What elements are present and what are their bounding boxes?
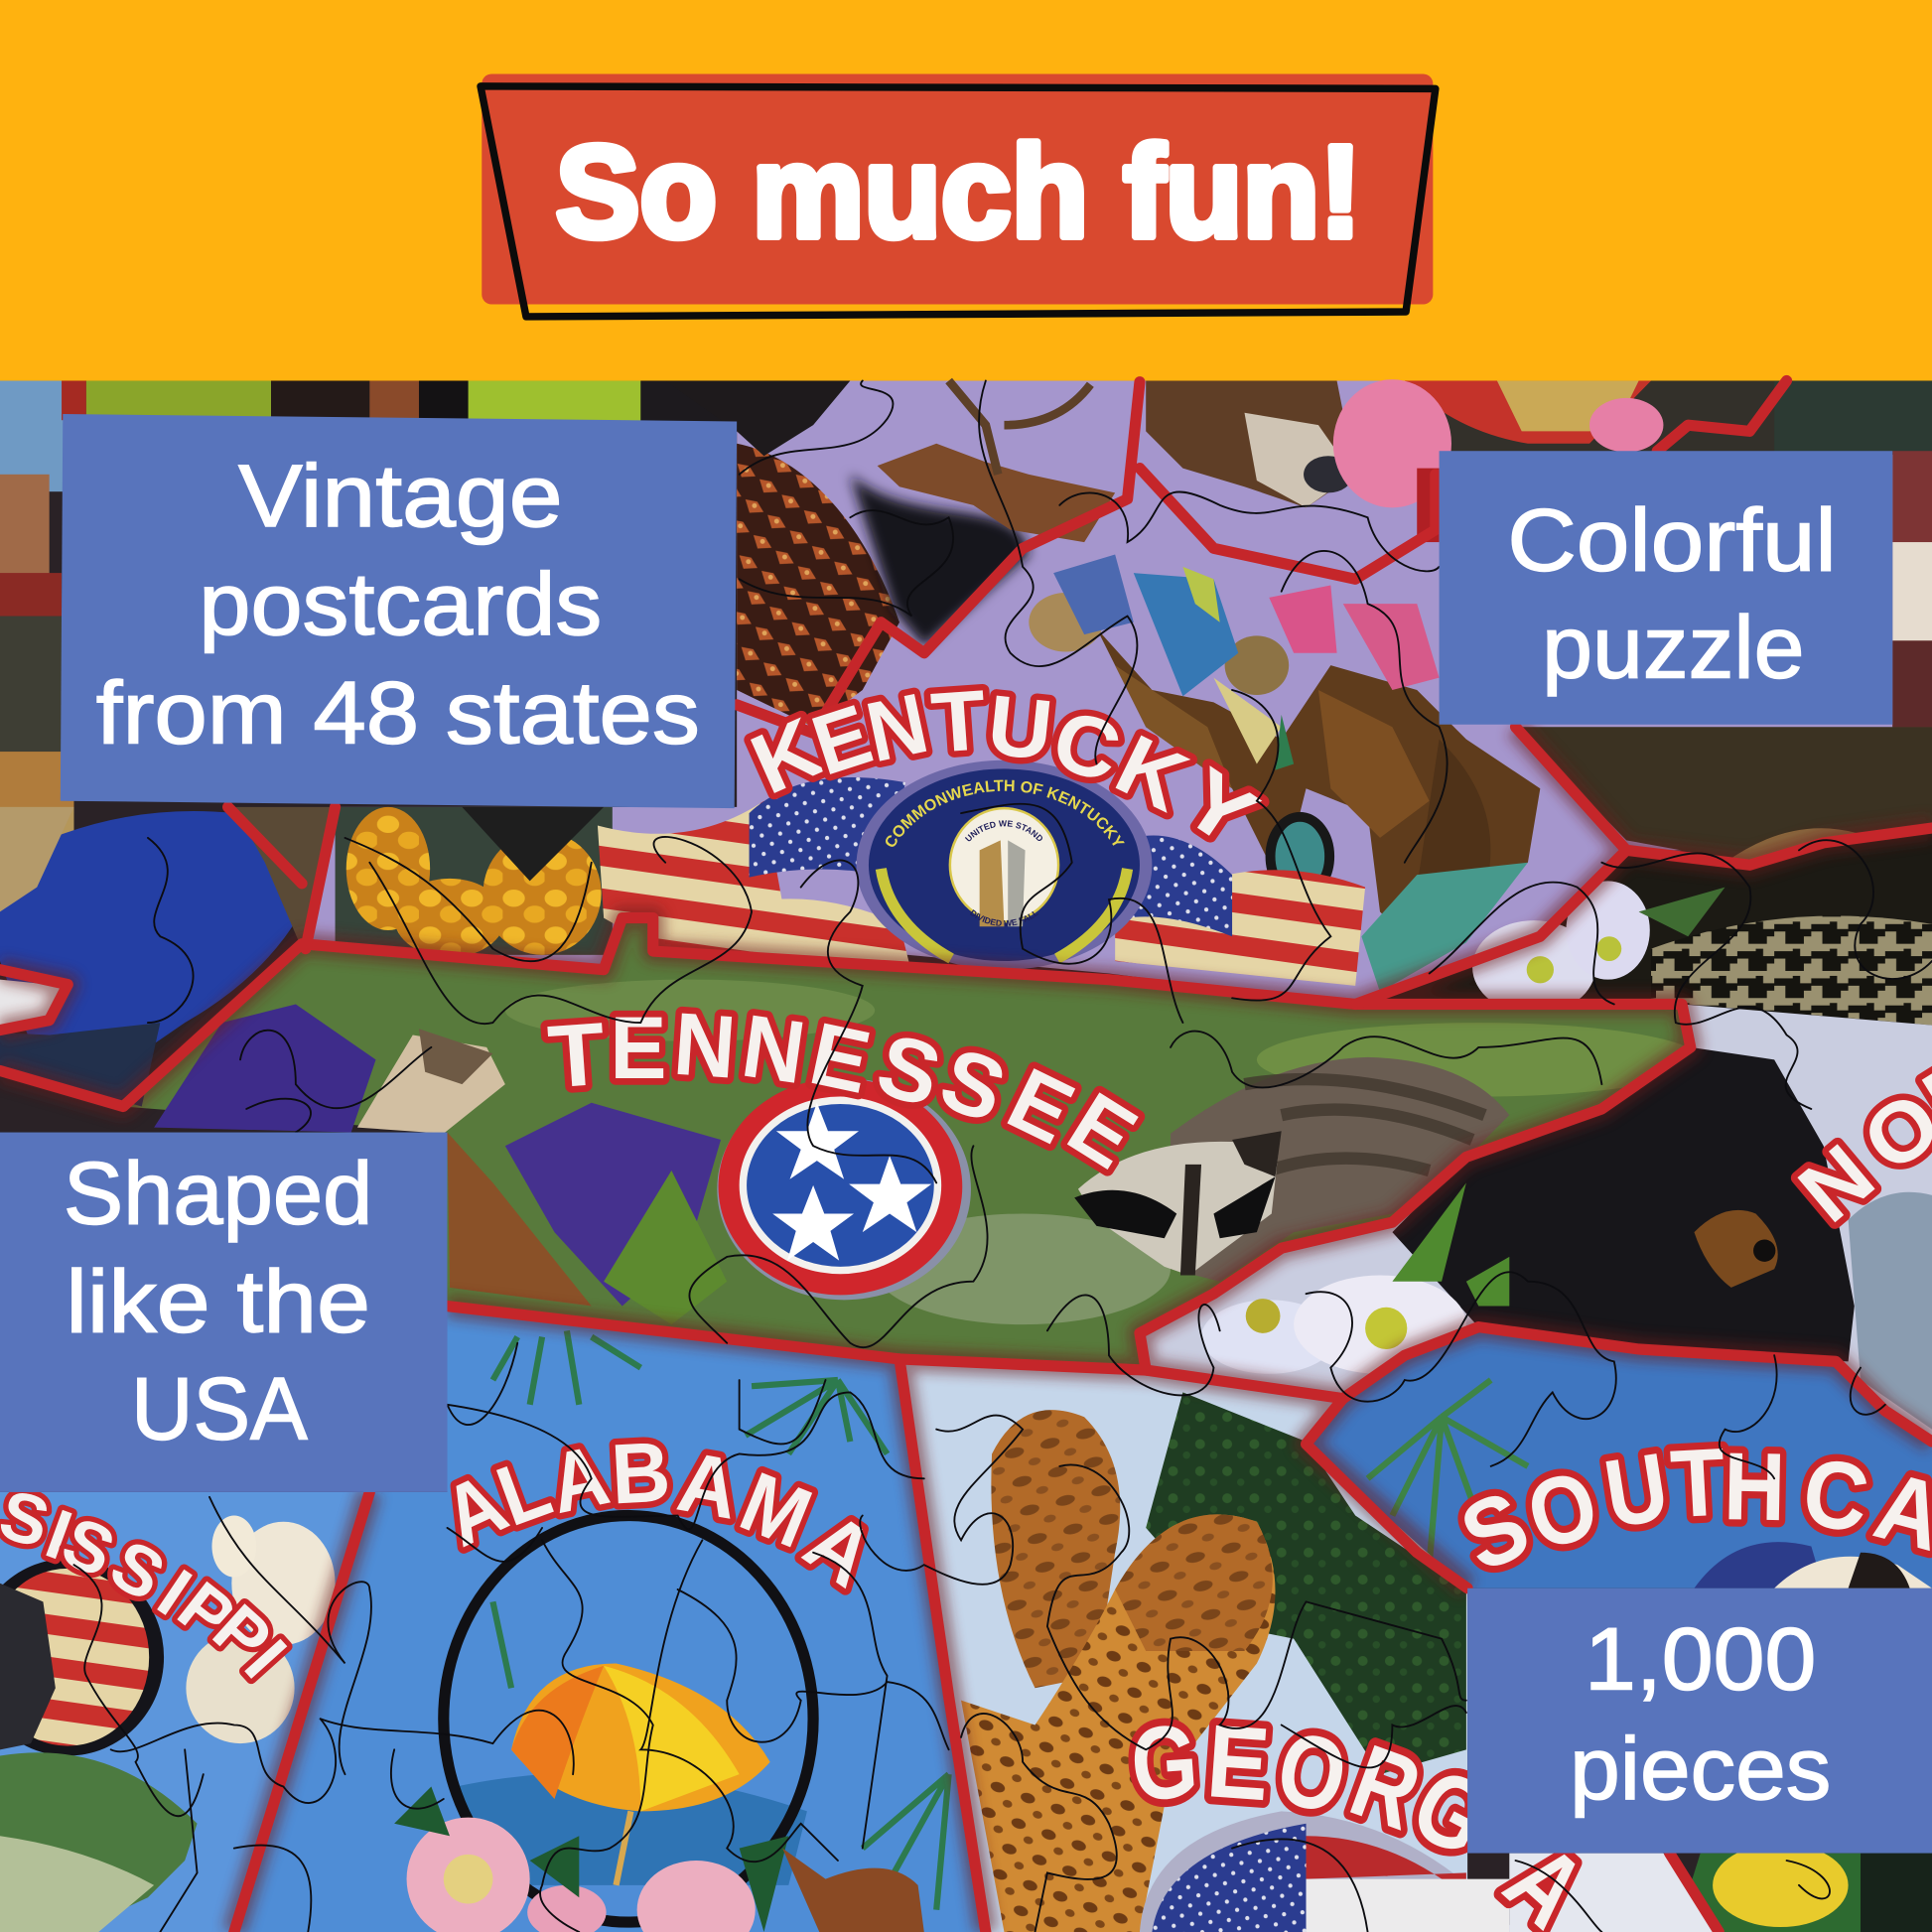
illustration: light hill on Tennessee [505, 980, 1701, 1324]
illustration: bass fish [0, 1752, 198, 1932]
panel: colorful puzzle: puzzle [1542, 598, 1805, 697]
state name: South Carolina: T [1668, 1428, 1727, 1538]
state name: Kentucky: E [801, 686, 883, 793]
illustration: deer [878, 380, 1115, 542]
state name: Tennessee: E [802, 1004, 879, 1112]
state name: Tennessee: S [867, 1014, 951, 1126]
state name: Alabama: A [788, 1493, 892, 1605]
state name: Alabama: A [542, 1428, 617, 1532]
panel: colorful puzzle: Colorful [1507, 490, 1837, 590]
state name: Mississippi: P [164, 1567, 249, 1657]
panel: 1,000 pieces: 1,000 [1585, 1609, 1816, 1709]
state name: Mississippi: I [145, 1554, 205, 1630]
region: dark top right [1405, 380, 1932, 752]
illustration: dogwood flowers North Carolina [1201, 1182, 1509, 1374]
panel: colorful puzzle [1440, 451, 1892, 725]
region: Kentucky background [302, 380, 1932, 1004]
illustration: Kentucky goldenrod [336, 807, 613, 957]
state name: Georgia: O [1268, 1711, 1356, 1837]
illustration: cave maze pattern [1651, 916, 1932, 1026]
state name: South Carolina: O [1516, 1449, 1609, 1571]
state name: Mississippi [0, 1474, 302, 1692]
panel: vintage postcards: postcards [199, 554, 602, 653]
illustration: Georgia trees [1146, 1392, 1466, 1774]
state name: Mississippi: I [37, 1494, 81, 1575]
illustration: South Carolina palmetto [1368, 1380, 1528, 1565]
panel: shaped like the USA: Shaped [64, 1143, 372, 1242]
state name: Kentucky [738, 672, 1274, 866]
illustration: Kentucky seal: DIVIDED WE FALL [970, 909, 1038, 926]
illustration: Alabama palms [492, 1330, 949, 1910]
state name: Alabama: L [485, 1440, 563, 1545]
state name: Tennessee: E [994, 1048, 1088, 1163]
title banner: So much fun! [556, 118, 1361, 264]
region: North Carolina background [1140, 1004, 1932, 1442]
state name: South Carolina: C [1797, 1438, 1875, 1553]
state name: Tennessee: N [737, 996, 811, 1103]
illustration: Kentucky seal: UNITED WE STAND [965, 820, 1042, 842]
illustration: left iris [154, 1004, 376, 1133]
puzzle piece cut lines [73, 380, 1932, 1932]
state name: Tennessee: T [545, 1004, 609, 1107]
state name: Tennessee: E [1052, 1073, 1153, 1187]
illustration: bird head top [665, 380, 850, 456]
state name: Kentucky: N [859, 674, 935, 780]
illustration: camellias [394, 1787, 788, 1932]
illustration: raccoon [1074, 1057, 1509, 1282]
state name: Georgia: G [1395, 1746, 1507, 1878]
illustration: Kentucky seal [856, 760, 1152, 969]
state name: South Carolina [1446, 1428, 1932, 1591]
state name: Alabama: A [430, 1455, 520, 1565]
illustration: Mississippi flag and butterfly [0, 1559, 164, 1756]
illustration: gray water North Carolina [1849, 1192, 1932, 1430]
illustration: peanuts [961, 1410, 1276, 1932]
panel: shaped like the USA: like the [66, 1252, 370, 1351]
state name: Georgia: R [1337, 1724, 1435, 1853]
illustration: brown thrasher [357, 1029, 592, 1307]
state name: Kentucky: Y [1166, 749, 1274, 866]
region: South Carolina [1307, 1327, 1932, 1588]
region: Alabama [234, 1307, 986, 1932]
state name: Tennessee: E [610, 999, 666, 1098]
title banner [481, 73, 1436, 317]
illustration: carnations [1333, 379, 1663, 542]
state name: Kentucky: C [1042, 691, 1131, 800]
panel: vintage postcards: Vintage [238, 446, 563, 545]
panel: shaped like the USA [0, 1133, 448, 1492]
state name: Tennessee [545, 994, 1153, 1187]
state name: Kentucky: U [983, 677, 1057, 778]
panel: shaped like the USA: USA [131, 1359, 308, 1458]
illustration: horseshoe [1271, 817, 1329, 896]
state name: Kentucky: K [1102, 716, 1201, 830]
illustration: black bear [1392, 1047, 1855, 1361]
illustration: tan hill [1725, 828, 1897, 875]
illustration: Georgia flag badge [1140, 1811, 1516, 1932]
region: Georgia [899, 1359, 1467, 1932]
illustration: beach umbrella [511, 1663, 770, 1885]
state name: Kentucky: K [738, 699, 835, 812]
illustration: hummingbird [782, 1849, 924, 1932]
illustration: blue jay [0, 807, 336, 1106]
state name: Kentucky: T [928, 672, 989, 770]
illustration: right iris [505, 1103, 727, 1324]
panel: vintage postcards: from 48 states [96, 662, 700, 761]
region: Virginia band [1355, 828, 1932, 1026]
illustration: cow [1146, 380, 1355, 507]
state name: Tennessee: N [671, 994, 739, 1097]
state name: Alabama: B [609, 1424, 672, 1522]
state name: Tennessee: S [928, 1028, 1018, 1142]
illustration: racing horses [1029, 554, 1540, 949]
state name: South Carolina: U [1597, 1433, 1675, 1549]
panel: 1,000 pieces [1467, 1588, 1932, 1854]
region: far left postcards [0, 380, 788, 894]
illustration: eagle and flag at South Carolina [1694, 1542, 1932, 1588]
illustration: Kentucky seal: COMMONWEALTH OF KENTUCKY [886, 780, 1125, 847]
state name: South Carolina: S [1446, 1470, 1544, 1591]
illustration: Kentucky flag [598, 777, 1365, 986]
state name: Alabama: A [671, 1433, 746, 1537]
region: Mississippi [0, 1492, 369, 1932]
state name: Mississippi: P [199, 1589, 286, 1679]
region: right dark Kentucky-Virginia hills [1516, 727, 1932, 863]
state name: Mississippi: S [52, 1501, 126, 1591]
state name: North Carolina [1781, 1034, 1932, 1240]
illustration: pheasant [737, 444, 899, 727]
region: Tennessee [123, 918, 1691, 1370]
state name: Mississippi: S [98, 1524, 178, 1615]
state name: North Carolina: N [1781, 1126, 1891, 1240]
illustration: Tennessee flag [717, 1078, 971, 1300]
panel: 1,000 pieces: pieces [1570, 1719, 1831, 1818]
state name: Georgia: E [1203, 1703, 1273, 1822]
state name: Georgia: G [1128, 1704, 1201, 1823]
state name: South Carolina: H [1723, 1433, 1786, 1541]
state name: Mississippi: I [230, 1625, 302, 1692]
header band [0, 0, 1932, 380]
illustration: Georgia corner flowers [1509, 1844, 1932, 1932]
illustration: dogwood flowers Virginia [1472, 881, 1725, 1014]
illustration: black shadow behind pheasant [850, 475, 1029, 647]
illustration: Alabama porthole and sea [444, 1516, 813, 1922]
illustration: magnolia flowers [186, 1516, 336, 1743]
illustration: teal pasture [1361, 863, 1528, 992]
state name: Alabama: M [728, 1454, 823, 1567]
state name: Georgia [1128, 1703, 1606, 1932]
panel: vintage postcards [61, 414, 737, 808]
state name: Alabama [430, 1424, 892, 1605]
